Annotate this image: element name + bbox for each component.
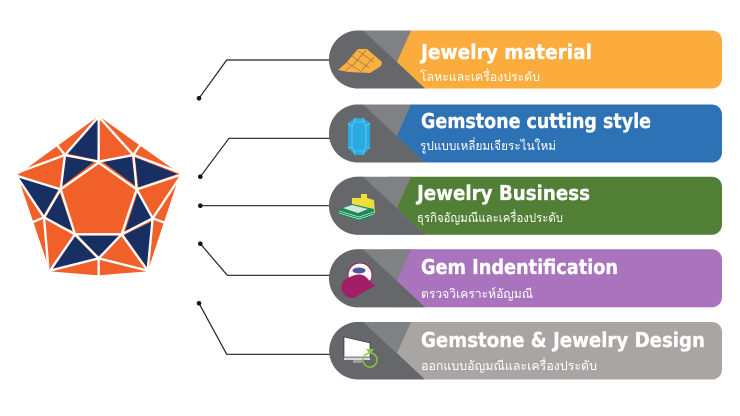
panel: Gemstone and Jewelry Design: [329, 322, 722, 380]
text: Thai subtitle: ธุรกิจอัญมณีและเครื่องประดับ: [417, 209, 563, 226]
icon: gold bars: [338, 49, 382, 73]
connector lines: [197, 60, 331, 354]
text: Thai subtitle: ตรวจวิเคราะห์อัญมณี: [421, 287, 533, 301]
text: Thai subtitle: รูปแบบเหลี่ยมเจียระไนใหม่: [420, 137, 556, 154]
heading: Gemstone cutting style: Gemstone cutting style: [421, 109, 651, 133]
heading: Jewelry material: Jewelry material: [419, 40, 592, 64]
panel: Jewelry Business: [329, 177, 722, 235]
heading: Gem Indentification: Gem Indentification: [421, 255, 618, 279]
heading: Gemstone and Jewelry Design: Gemstone & Jewelry Design: [421, 328, 705, 352]
icon: blue gemstone: [348, 118, 370, 155]
text: Thai subtitle: ออกแบบอัญมณีและเครื่องประดับ: [421, 357, 597, 373]
icon: money and gold: [339, 194, 375, 221]
panel: Gem Indentification: [329, 249, 722, 307]
pentagon gem logo: [17, 116, 180, 275]
panel: Gemstone cutting style: [329, 104, 722, 162]
panel: Jewelry material: [329, 30, 722, 88]
text: Thai subtitle: โลหะและเครื่องประดับ: [420, 68, 540, 84]
icon: monitor and ring: [344, 337, 377, 367]
icon: gem identification: [341, 263, 375, 298]
heading: Jewelry Business: Jewelry Business: [415, 181, 590, 205]
